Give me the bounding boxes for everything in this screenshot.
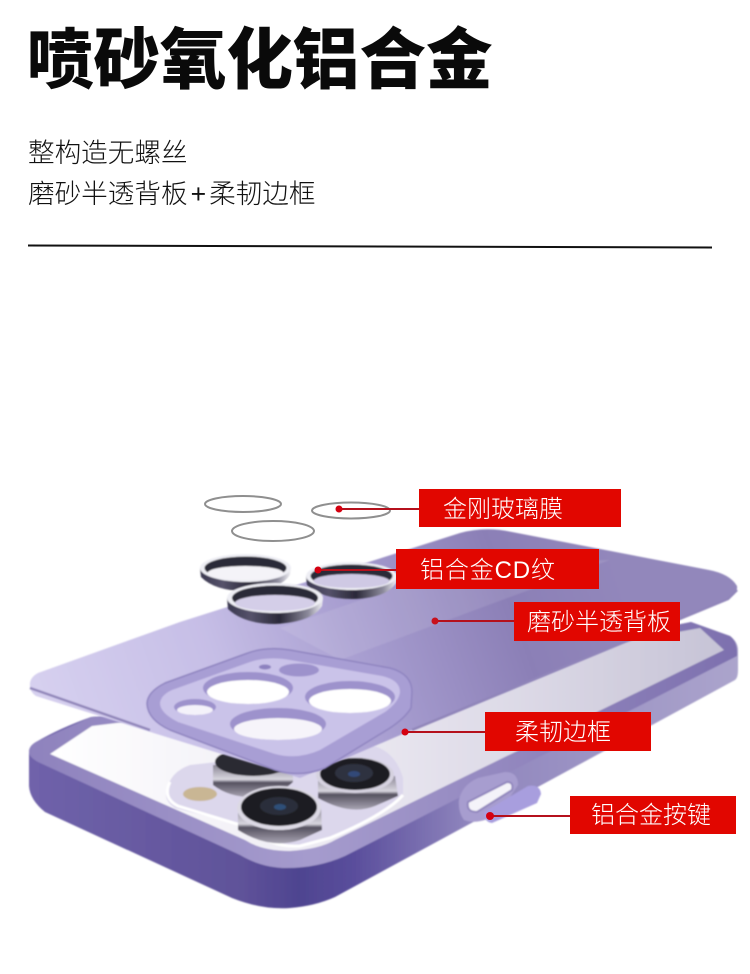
plate body bbox=[30, 529, 737, 778]
case interior bbox=[50, 628, 724, 851]
frosted back plate bbox=[30, 529, 737, 778]
lens front bbox=[237, 786, 322, 843]
case top rim bbox=[29, 622, 737, 868]
label: diamond glass film bbox=[336, 489, 621, 527]
hole 6 bbox=[259, 664, 271, 670]
aluminium CD rings bbox=[200, 554, 397, 624]
side button cutout bbox=[459, 772, 518, 822]
lens right bbox=[316, 757, 398, 810]
hole 4 bbox=[174, 699, 216, 715]
camera module highlight bbox=[167, 782, 403, 846]
plate lower edge bbox=[30, 590, 737, 730]
phone case frame bbox=[29, 622, 738, 908]
ring right bbox=[306, 562, 397, 599]
label: aluminium button: 铝合金按键 bbox=[591, 802, 711, 829]
label: aluminium button bbox=[486, 796, 736, 834]
case side wall bbox=[29, 622, 738, 908]
plate highlight band bbox=[280, 560, 610, 660]
hole 1 bbox=[203, 672, 293, 704]
divider line bbox=[28, 246, 712, 248]
hole 3 bbox=[230, 708, 326, 740]
ring left bbox=[200, 554, 291, 591]
flash lens bbox=[183, 787, 217, 801]
camera module bbox=[166, 745, 403, 846]
camera island bbox=[147, 649, 412, 774]
ring front bbox=[227, 583, 323, 624]
hole 5 bbox=[279, 664, 319, 676]
label: flexible frame bbox=[402, 712, 651, 751]
lens back left bbox=[213, 748, 293, 797]
label: diamond glass film: 金刚玻璃膜 bbox=[443, 496, 563, 523]
aluminium button bbox=[484, 786, 541, 823]
subtitle line 2: 磨砂半透背板+柔韧边框 bbox=[28, 179, 315, 209]
glass film rings bbox=[205, 496, 390, 541]
label: frosted translucent back: 磨砂半透背板 bbox=[527, 609, 671, 636]
label: aluminium CD texture: 铝合金CD纹 bbox=[420, 557, 555, 584]
label: aluminium CD texture bbox=[314, 549, 599, 589]
subtitle line 1: 整构造无螺丝 bbox=[28, 138, 188, 168]
title: 喷砂氧化铝合金 bbox=[27, 24, 492, 98]
label: frosted translucent back bbox=[432, 602, 680, 641]
label: flexible frame: 柔韧边框 bbox=[515, 719, 611, 746]
hole 2 bbox=[305, 681, 395, 713]
